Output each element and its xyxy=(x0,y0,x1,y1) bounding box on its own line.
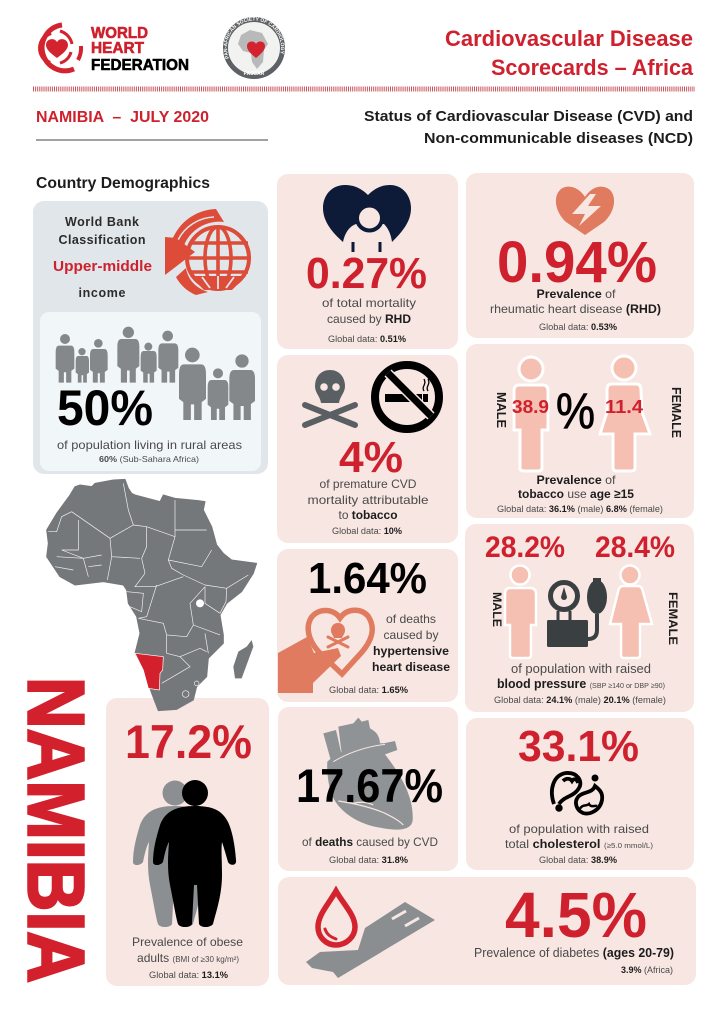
icon: anatomical heart xyxy=(323,718,413,830)
heading: country demographics: Country Demographics xyxy=(36,175,210,192)
caption: tobacco mortality: mortality attributable xyxy=(308,493,429,507)
label: male: MALE xyxy=(490,592,504,627)
caption: RHD mortality xyxy=(322,296,416,344)
caption: hypertensive deaths: hypertensive xyxy=(373,644,449,658)
stat: percent sign: % xyxy=(556,383,595,439)
caption: obesity xyxy=(132,935,243,980)
icon: skull and crossbones xyxy=(305,370,355,425)
icon: blood pressure monitor xyxy=(547,578,607,647)
caption: RHD mortality: Global data: 0.51% xyxy=(328,334,406,344)
caption: CVD deaths: Global data: 31.8% xyxy=(329,855,408,865)
stat: male blood pressure: 28.2% xyxy=(485,531,565,564)
stat: female blood pressure: 28.4% xyxy=(595,531,675,564)
panel: RHD prevalence xyxy=(466,173,694,338)
icon: female figure xyxy=(600,356,650,471)
caption: cholesterol: Global data: 38.9% xyxy=(539,855,617,865)
panel: rural population xyxy=(40,312,261,471)
title: Cardiovascular Disease xyxy=(445,26,693,51)
icon: cholesterol drops xyxy=(552,773,602,813)
text: world bank classification xyxy=(53,215,152,300)
stat: RHD mortality: 0.27% xyxy=(306,249,427,298)
text: world bank classification: Upper-middle xyxy=(53,258,152,275)
caption: rural population xyxy=(57,438,242,464)
caption: diabetes: Prevalence of diabetes (ages 20-79) xyxy=(474,945,674,960)
panel: tobacco mortality xyxy=(277,355,458,543)
panel: cholesterol xyxy=(466,718,694,870)
caption: tobacco use: tobacco use age ≥15 xyxy=(518,487,634,501)
caption: CVD deaths: of deaths caused by CVD xyxy=(302,835,438,849)
icon: test strip xyxy=(306,902,435,978)
title xyxy=(445,26,694,80)
caption: tobacco use: Prevalence of xyxy=(536,473,616,487)
icon: broken heart xyxy=(556,187,614,235)
caption: CVD deaths xyxy=(302,835,438,865)
stat: CVD deaths: 17.67% xyxy=(296,759,443,812)
icon: globe with arrow xyxy=(165,209,250,295)
caption: rural population: of population living in rural areas xyxy=(57,438,242,452)
caption: cholesterol: of population with raised xyxy=(509,822,649,836)
map: Africa with Namibia highlighted xyxy=(47,479,257,711)
caption: hypertensive deaths xyxy=(372,612,450,674)
panel: hypertensive heart disease xyxy=(277,549,458,702)
label: male: MALE xyxy=(494,392,509,428)
icon: heart with ring xyxy=(323,185,411,252)
caption: obesity: Global data: 13.1% xyxy=(149,970,228,980)
caption: rural population: 60% (Sub-Sahara Africa) xyxy=(99,454,199,464)
icon: people xyxy=(56,327,255,420)
subtitle xyxy=(364,108,693,147)
icon: female figure xyxy=(610,566,652,658)
text: world bank classification: income xyxy=(78,286,126,300)
caption: blood pressure: of population with raised xyxy=(511,661,651,676)
logo: World Heart Federation: WORLD xyxy=(91,25,148,42)
logo: PASCAR: PASCAR xyxy=(244,71,265,77)
stat: diabetes: 4.5% xyxy=(505,879,647,951)
panel: RHD mortality xyxy=(277,174,458,349)
stat: female tobacco: 11.4 xyxy=(605,397,643,417)
caption: hypertensive deaths: of deaths xyxy=(386,612,436,626)
panel: tobacco use xyxy=(466,344,694,518)
caption: cholesterol xyxy=(505,822,654,865)
caption: obesity: Prevalence of obese xyxy=(132,935,243,949)
label: female: FEMALE xyxy=(669,387,684,438)
caption: RHD mortality: of total mortality xyxy=(322,296,416,310)
caption: RHD prevalence: Global data: 0.53% xyxy=(539,322,617,332)
caption: obesity: adults (BMI of ≥30 kg/m²) xyxy=(137,951,239,965)
logo: World Heart Federation: FEDERATION xyxy=(91,57,189,74)
caption: RHD prevalence: rheumatic heart disease (RHD) xyxy=(490,302,661,316)
caption: tobacco use: Global data: 36.1% (male) 6.8% (female) xyxy=(497,504,663,514)
stat: male tobacco: 38.9 xyxy=(512,397,549,417)
caption: tobacco mortality: of premature CVD xyxy=(320,477,417,491)
text: world bank classification: World Bank xyxy=(65,215,139,229)
caption: tobacco mortality: Global data: 10% xyxy=(332,526,402,536)
caption: blood pressure: Global data: 24.1% (male) 20.1% (female) xyxy=(494,695,666,705)
stat: RHD prevalence: 0.94% xyxy=(497,230,657,295)
icon: obese figures xyxy=(133,780,236,927)
panel: blood pressure xyxy=(465,524,694,712)
icon: male figure xyxy=(505,566,536,658)
stat: hypertensive deaths: 1.64% xyxy=(308,554,427,603)
caption: diabetes xyxy=(474,945,674,975)
label: female: FEMALE xyxy=(666,592,680,645)
country and date: NAMIBIA – JULY 2020 xyxy=(36,109,209,126)
caption: RHD mortality: caused by RHD xyxy=(327,312,411,326)
logo: World Heart Federation xyxy=(40,25,189,74)
text: world bank classification: Classification xyxy=(58,233,146,247)
panel: CVD deaths xyxy=(278,707,458,871)
caption: tobacco use xyxy=(497,473,663,514)
subtitle: Status of Cardiovascular Disease (CVD) and xyxy=(364,108,693,125)
caption: hypertensive deaths: heart disease xyxy=(372,660,450,674)
panel: demographics xyxy=(33,201,268,474)
caption: blood pressure xyxy=(494,661,666,705)
vertical title: NAMIBIA: NAMIBIA xyxy=(12,677,100,983)
logo: PASCAR: PAN-AFRICAN SOCIETY OF CARDIOLOGY xyxy=(224,17,284,60)
title: Scorecards – Africa xyxy=(491,55,694,80)
caption: hypertensive deaths: caused by xyxy=(384,628,438,642)
stat: rural population: 50% xyxy=(57,380,153,436)
logo: World Heart Federation: HEART xyxy=(91,40,144,57)
icon: hand holding heart with skull xyxy=(278,610,372,693)
caption: blood pressure: blood pressure (SBP ≥140 or DBP ≥90) xyxy=(497,676,665,691)
stat: tobacco mortality: 4% xyxy=(339,433,403,482)
panel: diabetes xyxy=(278,877,696,985)
icon: no smoking xyxy=(375,365,439,429)
caption: tobacco mortality: to tobacco xyxy=(338,508,398,522)
stat: obesity: 17.2% xyxy=(125,715,252,768)
panel: obesity xyxy=(106,698,269,986)
subtitle: Non-communicable diseases (NCD) xyxy=(424,130,693,147)
logo: PASCAR xyxy=(223,17,285,79)
icon: male figure xyxy=(514,357,548,471)
caption: cholesterol: total cholesterol (≥5.0 mmol/L) xyxy=(505,837,654,851)
caption: tobacco mortality xyxy=(308,477,429,536)
icon: blood drop xyxy=(318,891,355,945)
caption: RHD prevalence xyxy=(490,287,661,332)
global data: hypertensive: Global data: 1.65% xyxy=(329,685,408,695)
caption: RHD prevalence: Prevalence of xyxy=(536,287,616,301)
caption: diabetes: 3.9% (Africa) xyxy=(621,965,673,975)
stat: cholesterol: 33.1% xyxy=(518,722,639,771)
